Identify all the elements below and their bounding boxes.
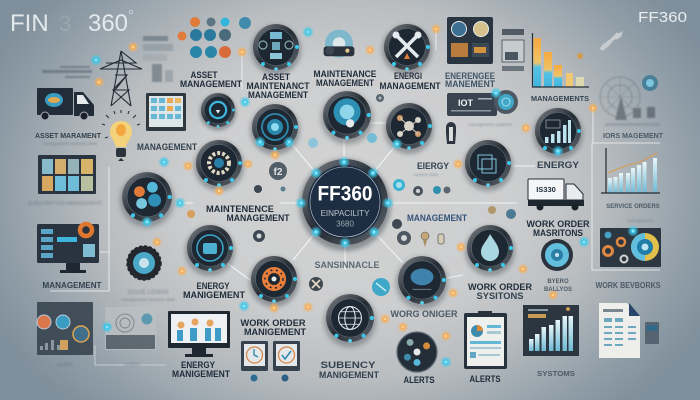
monitor with orange gear [37, 224, 99, 273]
labels: dark headings: MASRITONS [533, 228, 583, 238]
labels: dark headings: MAINTENANCE [314, 69, 376, 79]
icon: cyan dot [104, 324, 110, 330]
node: map [396, 256, 448, 309]
node: round sensor [321, 91, 373, 144]
delivery truck with IS330 box [528, 179, 584, 210]
labels: dark headings: ENERGY [196, 281, 230, 291]
panel: growth bars [523, 305, 579, 356]
node: orange gear [249, 256, 299, 307]
labels: dark headings: SERVICE ORDERS [606, 204, 660, 210]
labels: dark headings: MANAGEMENT [407, 213, 467, 223]
labels: dark headings: MANEMENT [445, 79, 495, 89]
labels: dark headings: WORG ONIGER [390, 309, 458, 319]
small faint device [645, 322, 659, 344]
glow dots [90, 24, 639, 368]
node: center FF360: EINPACILITY [320, 208, 370, 218]
labels: dark headings: ENERGY [537, 160, 579, 170]
labels: dark headings: ASSET [190, 70, 218, 80]
title: FIN [10, 10, 49, 37]
node: connected parts [384, 103, 434, 154]
node: concentric [250, 104, 300, 155]
node: blue dial [541, 239, 573, 271]
brand label with wrench [600, 9, 687, 50]
node: center FF360: FF360 [318, 182, 372, 206]
labels: dark headings: MANAGEMENT [226, 213, 290, 223]
line and bar chart [601, 148, 660, 193]
clipboard [464, 311, 507, 369]
node: bar gauge [533, 108, 583, 159]
small badge F2: f2 [274, 167, 283, 178]
bar chart: top right [532, 33, 589, 87]
labels: dark headings: ENERENGEE [445, 71, 495, 81]
panel: gears and donut [600, 228, 661, 267]
labels: dark headings: MANAGEMENT [248, 90, 308, 100]
node: globe [324, 294, 376, 347]
labels: dark headings: MANAGEMENT [316, 78, 374, 88]
icon: button grid [178, 17, 251, 58]
labels: dark headings: ASSET MARAMENT [35, 131, 101, 140]
labels: dark headings: MANAGEMENT [137, 142, 197, 152]
labels: dark headings: EIERGY [417, 161, 449, 171]
labels: dark headings: MANIGEMENT [244, 327, 307, 337]
monitor: workers chart [168, 311, 230, 357]
node: alerts hub [397, 332, 437, 372]
labels: dark headings: ALERTS [470, 374, 500, 384]
labels: faint captions [28, 122, 654, 368]
labels: dark headings: MANIGEMENT [172, 369, 230, 379]
labels: dark headings: WORK ORDER [240, 318, 306, 328]
faint wheel icon far right [600, 77, 660, 126]
labels: faint captions: system data [414, 172, 439, 177]
icon: delivery truck [37, 88, 94, 120]
labels: dark headings: MAINTENENCE [206, 204, 274, 214]
icon: transmission tower [100, 51, 142, 106]
node: center FF360 [299, 159, 391, 251]
labels: dark headings: SYSITONS [476, 291, 524, 301]
labels: faint captions: SOUIE LEMAN [127, 290, 169, 296]
labels: dark headings: IORS MAGEMENT [603, 131, 663, 140]
node: water drop [465, 225, 515, 276]
labels: dark headings: BALLYOS [544, 287, 572, 293]
title: 360 [88, 10, 128, 37]
node: gears cluster [120, 172, 174, 227]
labels: dark headings: MANAGEMENT [42, 281, 102, 290]
node: gear [194, 140, 244, 191]
labels: dark headings: ASSET [262, 72, 290, 82]
labels: faint captions: management [627, 218, 654, 223]
faint small icons top left [42, 36, 173, 82]
small tool icon [309, 277, 323, 291]
labels: dark headings: ENERGI [394, 71, 422, 81]
panel: gauges dashboard [37, 302, 93, 355]
panel: faint radar [105, 307, 156, 350]
labels: dark headings: WORK ORDER [468, 282, 533, 292]
labels: dark headings: WORK BEVBORKS [596, 281, 661, 290]
labels: faint captions: management systems [468, 122, 513, 127]
title: 3 [59, 11, 71, 36]
tile panel [38, 155, 96, 194]
small pin icons [187, 94, 516, 296]
labels: dark headings: MANAGEMENTS [531, 94, 589, 103]
icon: light bulb [102, 110, 140, 161]
labels: dark headings: SYSTOMS [537, 369, 575, 378]
icon: blue target [642, 75, 658, 91]
labels: dark headings: MANAGEMENT [380, 81, 441, 91]
delivery truck with IS330 box: IS330 [536, 185, 556, 194]
labels: faint captions: system [124, 362, 140, 368]
panel: IoT [447, 90, 518, 116]
brand label with wrench: FF360 [638, 9, 687, 26]
labels: faint captions: SUBSCRIPTION MANAGEMENT [28, 201, 102, 207]
document [599, 303, 640, 358]
node: blue gauge [200, 93, 236, 131]
labels: dark headings: MANIGEMENT [319, 370, 379, 380]
panel: IoT: IOT [458, 98, 474, 108]
labels: dark headings: ENERGY [181, 360, 215, 370]
labels: faint captions: management systems data [121, 297, 176, 302]
labels: faint captions: system [57, 362, 73, 368]
labels: dark headings: WORK ORDER [526, 219, 590, 229]
labels: dark headings: SANSINNACLE [314, 260, 380, 270]
node: center FF360: 3680 [336, 220, 354, 228]
labels: dark headings [35, 69, 663, 385]
labels: dark headings: SUBENCY [320, 360, 376, 370]
labels: dark headings: BYERO [547, 279, 569, 285]
node: camera [185, 225, 235, 276]
node: blueprint [463, 140, 513, 191]
labels: dark headings: MANIGEMENT [183, 290, 246, 300]
title [10, 10, 133, 37]
node: top equipment [324, 30, 354, 58]
top-right dark panel [447, 17, 493, 64]
labels: faint captions: management systems data [43, 141, 98, 146]
small badge F2 [269, 162, 287, 180]
tablet [146, 93, 186, 131]
document column [502, 29, 524, 71]
node: dashboard tiles [251, 24, 301, 75]
timers [241, 341, 300, 382]
connector lines [50, 28, 660, 365]
node: crossed tools [382, 24, 432, 75]
labels: dark headings: MAINTENANCT [246, 81, 310, 91]
labels: dark headings: MANAGEMENT [180, 79, 242, 89]
labels: dark headings: ALERTS [404, 375, 434, 385]
node: dark gear with lens [127, 246, 161, 280]
